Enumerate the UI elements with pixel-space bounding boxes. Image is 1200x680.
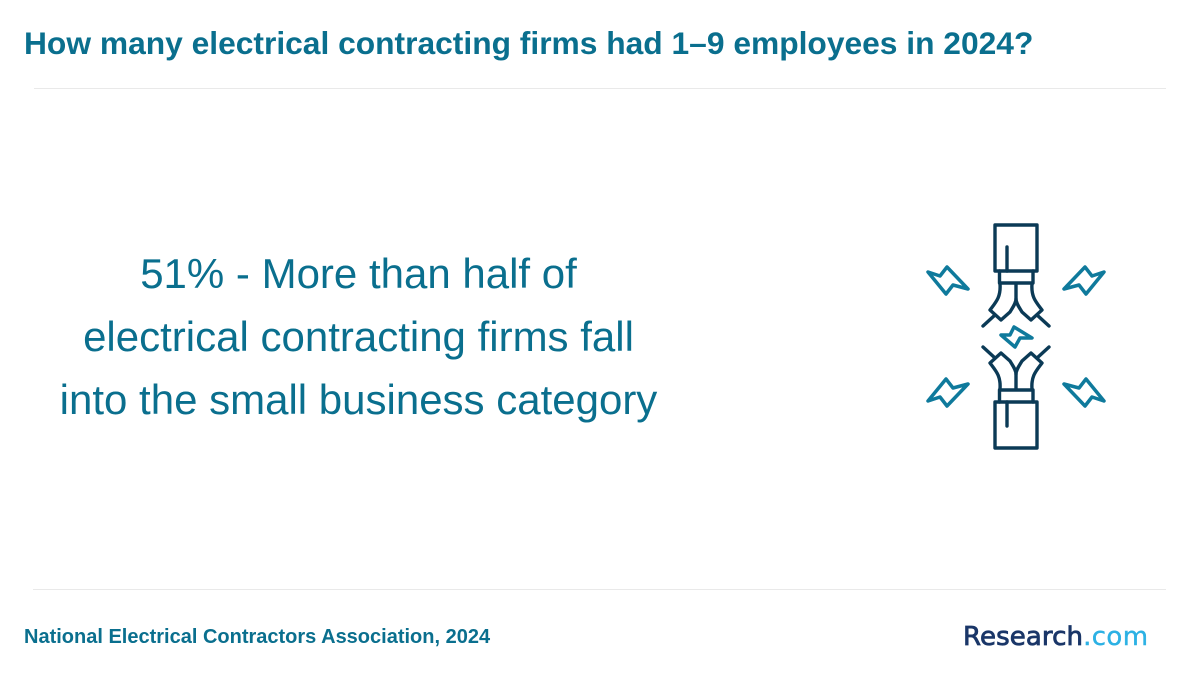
title: How many electrical contracting firms had 1–9 employees in 2024? [24, 25, 1033, 61]
icon: spark lower left [928, 379, 968, 406]
source note: National Electrical Contractors Association, 2024 [24, 626, 490, 648]
icon: spark upper left [928, 267, 968, 294]
icon: spark lower right [1064, 379, 1104, 406]
icon: upper cable half [983, 225, 1049, 326]
icon: spark centre [1001, 327, 1032, 347]
main statement [60, 250, 658, 423]
main statement: electrical contracting firms fall [83, 313, 634, 360]
main statement: 51% - More than half of [140, 250, 577, 297]
logo: Research.com: Research.com [963, 622, 1148, 652]
icon: severed electrical cable with sparks [926, 223, 1106, 450]
icon: spark upper right [1064, 267, 1104, 294]
main statement: into the small business category [60, 376, 657, 423]
icon: lower cable half [983, 347, 1049, 448]
